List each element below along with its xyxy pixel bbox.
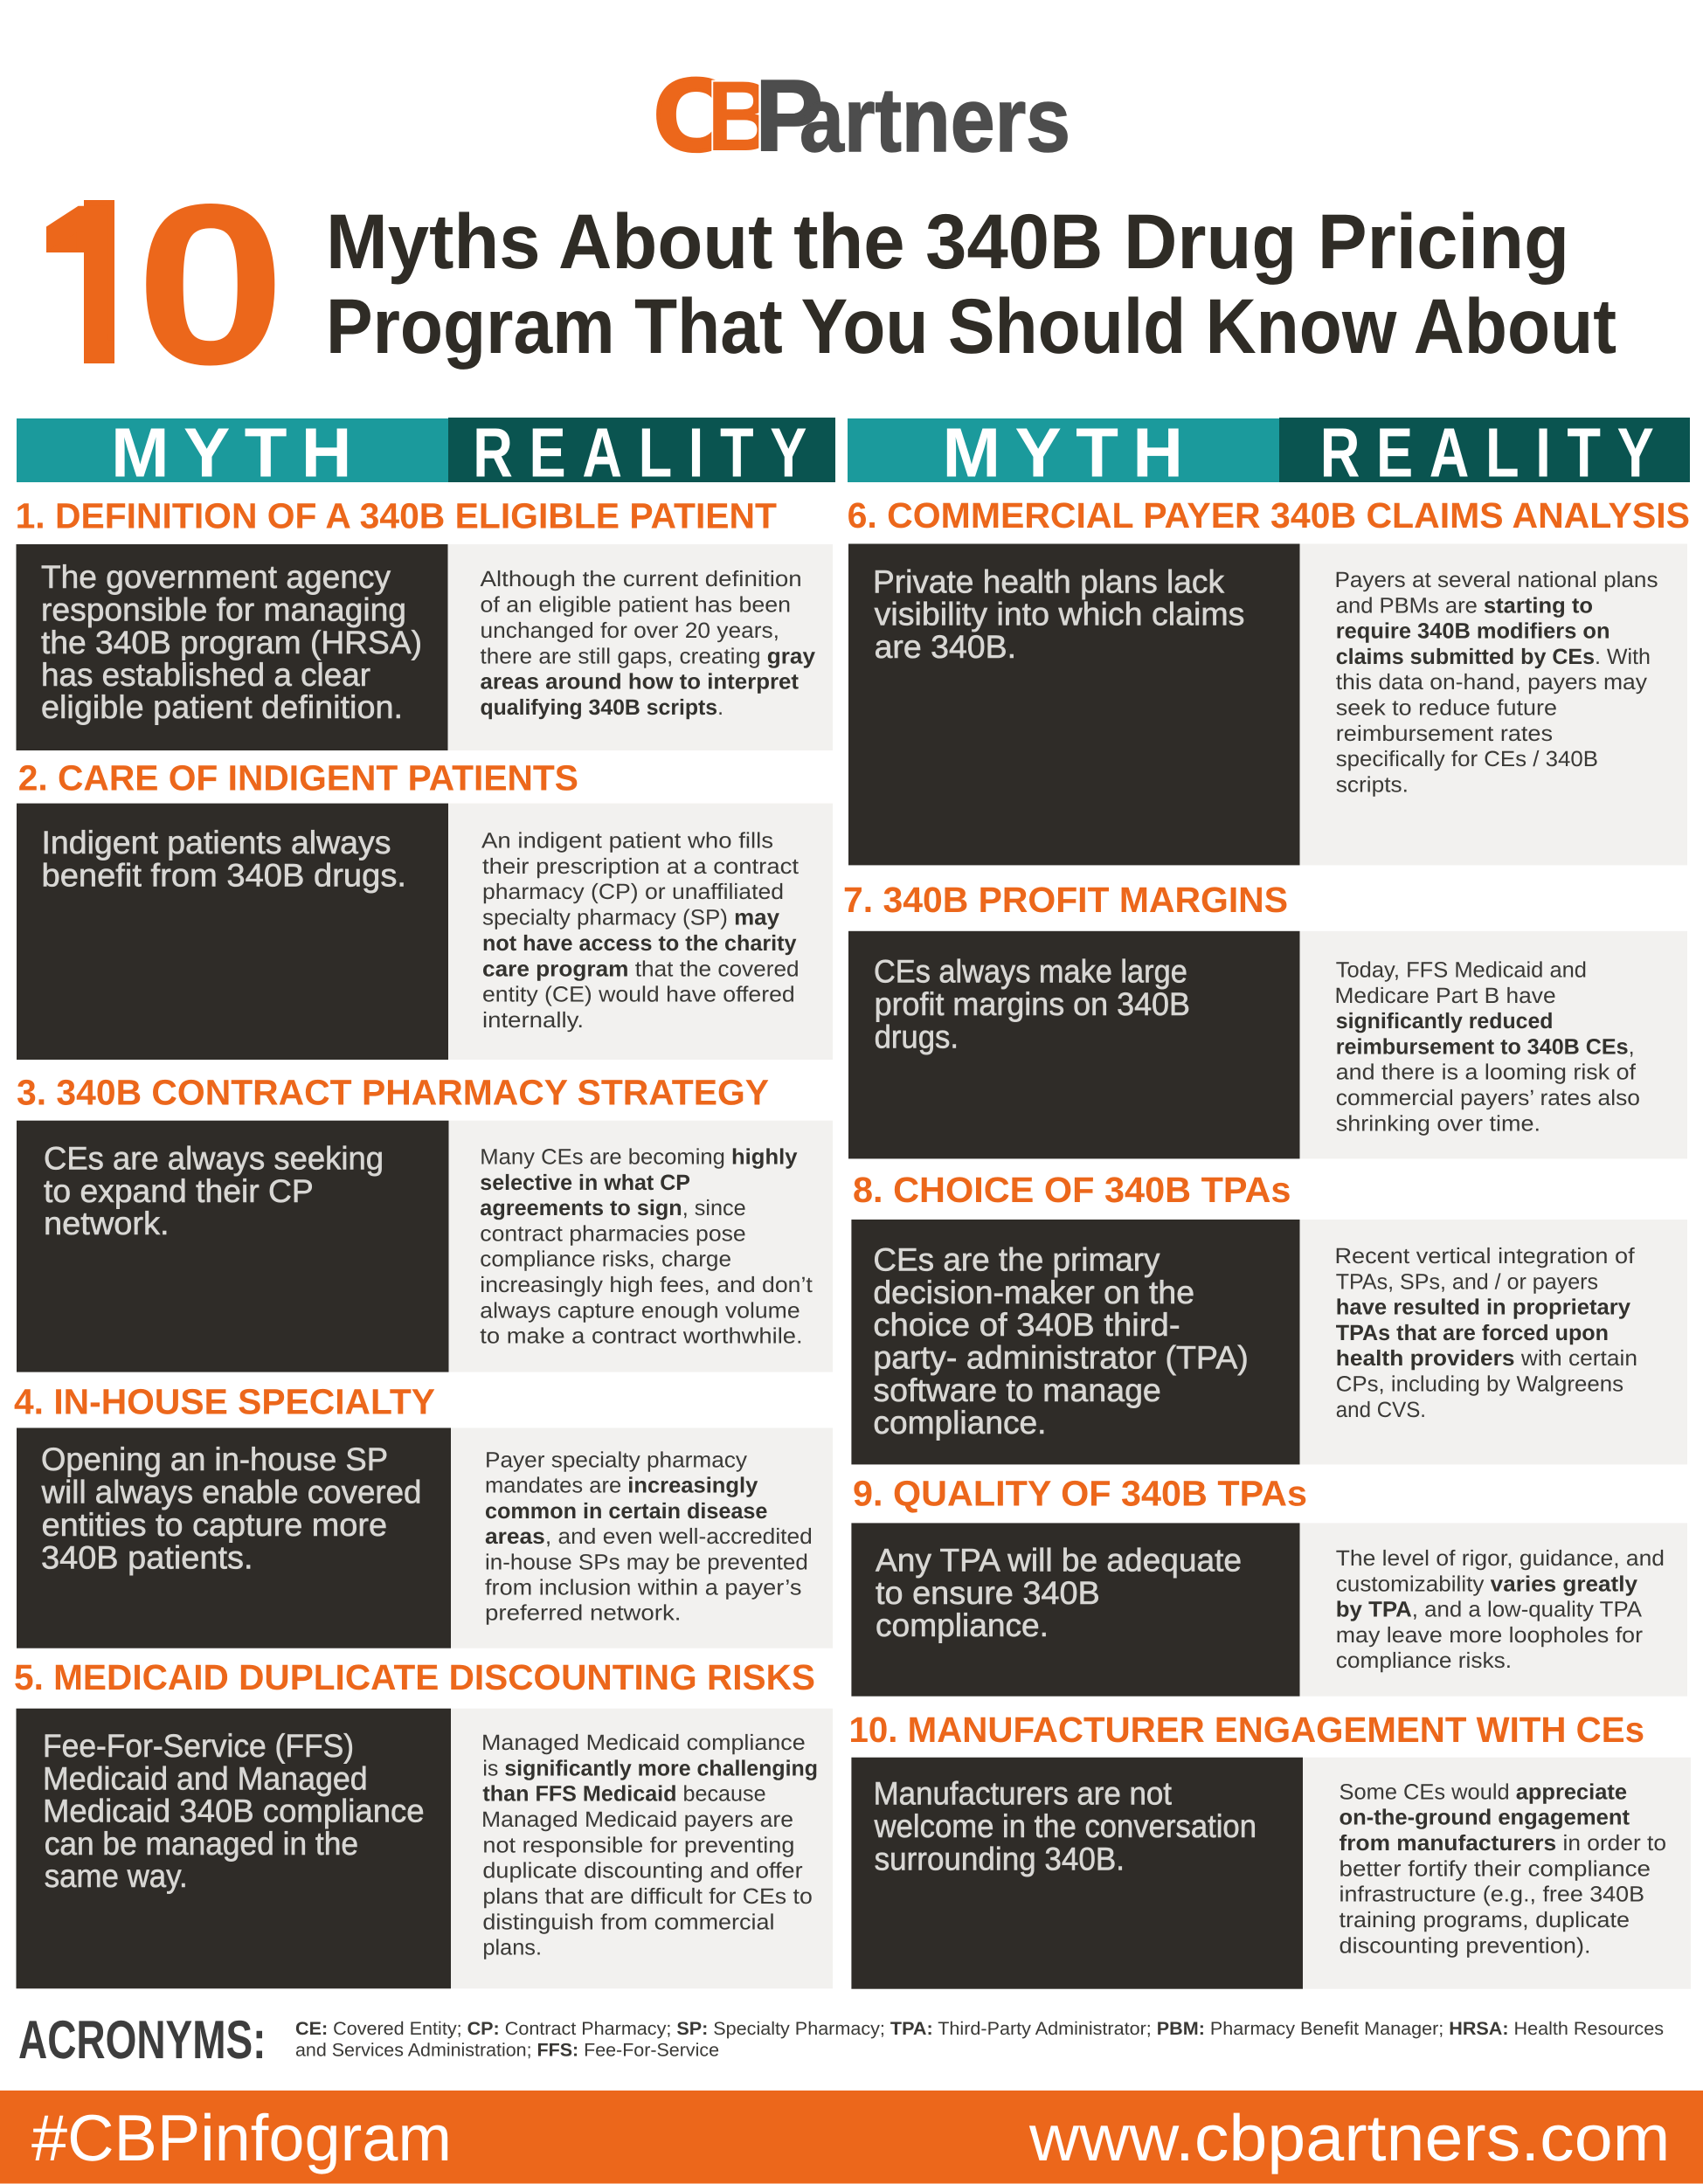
myth box 9: to ensure 340B [876, 1575, 1100, 1611]
reality box 3: Many CEs are becoming highly [480, 1144, 798, 1169]
reality box 1: qualifying 340B scripts. [481, 695, 723, 720]
myth box 6: visibility into which claims [875, 596, 1244, 632]
reality box 3: selective in what CP [480, 1171, 690, 1195]
reality box 4: mandates are increasingly [485, 1474, 758, 1498]
myth box 4: Opening an in-house SP [41, 1441, 388, 1477]
myth box 4: 340B patients. [41, 1540, 253, 1576]
reality box 4: from inclusion within a payer’s [485, 1576, 801, 1600]
myth box 10: surrounding 340B. [875, 1842, 1125, 1877]
header bar: right myth / reality: MYTH [942, 414, 1197, 492]
reality box 5: Managed Medicaid payers are [481, 1807, 793, 1832]
reality box 7: shrinking over time. [1336, 1111, 1540, 1136]
panel: myth 6 [848, 495, 1690, 865]
myth box 1: The government agency [41, 559, 391, 595]
logo: CBPartners: artners [800, 70, 1070, 171]
reality box 8: Recent vertical integration of [1335, 1244, 1635, 1268]
reality box 3: compliance risks, charge [480, 1248, 731, 1272]
reality box 1: Although the current definition [481, 567, 802, 591]
reality box 10: from manufacturers in order to [1339, 1831, 1666, 1856]
panel: myth 4 [14, 1382, 833, 1648]
heading 9: 9. QUALITY OF 340B TPAs [853, 1473, 1307, 1513]
reality box 5: plans that are difficult for CEs to [482, 1884, 813, 1909]
myth box 2 [17, 804, 448, 1060]
header bar: left myth / reality: REALITY [473, 414, 823, 492]
acronyms heading: ACRONYMS: [18, 2010, 266, 2070]
reality box 2: not have access to the charity [482, 931, 797, 956]
reality box 5: distinguish from commercial [482, 1910, 774, 1934]
reality box 6: specifically for CEs / 340B [1336, 747, 1598, 771]
heading 8: 8. CHOICE OF 340B TPAs [853, 1170, 1291, 1210]
myth box 7 [848, 931, 1300, 1158]
header bar: left myth / reality [17, 414, 835, 492]
reality box 8: have resulted in proprietary [1336, 1296, 1630, 1320]
reality box 2 [448, 804, 833, 1060]
panel: myth 2 [17, 758, 833, 1060]
myth box 8 [851, 1220, 1300, 1464]
heading 1: 1. DEFINITION OF A 340B ELIGIBLE PATIENT [16, 496, 777, 536]
big number 10: 0 [135, 156, 286, 412]
reality box 10: discounting prevention). [1339, 1933, 1591, 1958]
reality box 1: of an eligible patient has been [481, 592, 791, 617]
reality box 7: and there is a looming risk of [1336, 1061, 1636, 1085]
footer banner [0, 2091, 1703, 2184]
myth box 3: network. [44, 1206, 170, 1241]
logo: CBPartners: C [654, 58, 734, 173]
reality box 2: their prescription at a contract [482, 854, 799, 879]
reality box 6: reimbursement rates [1336, 722, 1553, 746]
reality box 8: health providers with certain [1336, 1346, 1637, 1371]
reality box 3: to make a contract worthwhile. [480, 1324, 803, 1349]
reality box 2: pharmacy (CP) or unaffiliated [482, 880, 784, 904]
reality box 3: increasingly high fees, and don’t [480, 1273, 813, 1297]
reality box 7: Today, FFS Medicaid and [1336, 957, 1587, 982]
reality box 10: Some CEs would appreciate [1339, 1780, 1627, 1804]
reality box 10: on-the-ground engagement [1339, 1806, 1630, 1830]
reality box 4: Payer specialty pharmacy [485, 1448, 748, 1473]
myth box 5: Fee-For-Service (FFS) [43, 1728, 354, 1764]
reality box 9 [1300, 1523, 1687, 1697]
reality box 2: care program that the covered [482, 957, 800, 981]
heading 7: 7. 340B PROFIT MARGINS [843, 880, 1288, 920]
myth box 2: benefit from 340B drugs. [42, 858, 406, 893]
myth box 1: responsible for managing [41, 591, 406, 627]
reality box 7 [1300, 931, 1687, 1158]
myth box 10: welcome in the conversation [874, 1808, 1256, 1844]
reality box 9: compliance risks. [1336, 1648, 1512, 1673]
header bar: right myth / reality [848, 414, 1690, 492]
myth box 8: party- administrator (TPA) [873, 1340, 1249, 1376]
myth box 7: profit margins on 340B [875, 986, 1190, 1022]
reality box 9: by TPA, and a low-quality TPA [1336, 1598, 1642, 1622]
acronyms text: CE: Covered Entity; CP: Contract Pharmacy; SP: Specialty Pharmacy; TPA: Third-Party Administrator; PBM: Pharmacy Benefit Manager; HRSA: Health Resources [295, 2019, 1664, 2039]
myth box 1: eligible patient definition. [41, 689, 403, 725]
reality box 9: The level of rigor, guidance, and [1336, 1546, 1665, 1571]
myth box 4: entities to capture more [42, 1507, 387, 1543]
myth box 1 [16, 544, 447, 750]
reality box 8 [1300, 1220, 1687, 1464]
reality box 6: this data on-hand, payers may [1336, 670, 1648, 695]
myth box 4 [17, 1427, 451, 1648]
myth box 1: the 340B program (HRSA) [41, 625, 422, 660]
reality box 1: unchanged for over 20 years, [481, 619, 779, 643]
reality box 8: and CVS. [1336, 1398, 1426, 1422]
myth box 3: CEs are always seeking [44, 1141, 384, 1176]
heading 6: 6. COMMERCIAL PAYER 340B CLAIMS ANALYSIS [848, 495, 1690, 536]
reality box 7: significantly reduced [1336, 1009, 1554, 1033]
panel: myth 8 [851, 1170, 1687, 1464]
myth box 8: software to manage [873, 1372, 1161, 1408]
myth box 8: choice of 340B third- [873, 1307, 1180, 1343]
myth box 5 [16, 1709, 451, 1988]
reality box 10: infrastructure (e.g., free 340B [1339, 1883, 1644, 1907]
myth box 5: same way. [45, 1858, 188, 1894]
reality box 7: reimbursement to 340B CEs, [1336, 1034, 1635, 1059]
myth box 9: Any TPA will be adequate [876, 1542, 1242, 1578]
title: Myths About the 340B Drug Pricing [326, 197, 1569, 285]
heading 2: 2. CARE OF INDIGENT PATIENTS [18, 758, 578, 798]
panel: myth 5 [14, 1657, 833, 1988]
reality box 8: TPAs that are forced upon [1336, 1321, 1609, 1345]
reality box 5: not responsible for preventing [482, 1833, 794, 1857]
myth box 7: CEs always make large [874, 954, 1187, 990]
myth box 1: has established a clear [41, 657, 370, 693]
reality box 8: TPAs, SPs, and / or payers [1336, 1269, 1598, 1294]
acronyms text [295, 2019, 1664, 2060]
myth box 7: drugs. [875, 1019, 959, 1054]
myth box 8: decision-maker on the [873, 1275, 1194, 1310]
myth box 8: compliance. [873, 1405, 1047, 1441]
myth box 6: are 340B. [875, 629, 1016, 665]
myth box 5: Medicaid 340B compliance [43, 1794, 425, 1829]
reality box 5: is significantly more challenging [482, 1756, 818, 1780]
reality box 7: commercial payers’ rates also [1336, 1086, 1640, 1110]
logo: CBPartners: B [707, 61, 775, 172]
reality box 6: require 340B modifiers on [1336, 619, 1610, 644]
myth box 9: compliance. [876, 1607, 1049, 1643]
reality box 4: common in certain disease [485, 1499, 767, 1524]
reality box 6: Payers at several national plans [1335, 568, 1658, 592]
reality box 5 [451, 1709, 833, 1988]
panel: myth 10 [849, 1710, 1691, 1989]
reality box 2: internally. [482, 1008, 584, 1033]
big number 10: 1 [23, 156, 150, 412]
heading 10: 10. MANUFACTURER ENGAGEMENT WITH CEs [849, 1710, 1644, 1750]
myth box 3: to expand their CP [44, 1173, 314, 1209]
big number 10 [46, 200, 274, 365]
myth box 8: CEs are the primary [873, 1242, 1160, 1277]
reality box 4: in-house SPs may be prevented [485, 1550, 808, 1574]
reality box 5: duplicate discounting and offer [482, 1859, 803, 1883]
reality box 2: An indigent patient who fills [481, 828, 773, 853]
reality box 1 [447, 544, 833, 750]
reality box 4: areas, and even well-accredited [485, 1524, 813, 1549]
reality box 4 [451, 1427, 833, 1648]
reality box 10: training programs, duplicate [1339, 1908, 1630, 1932]
reality box 6: scripts. [1336, 772, 1409, 797]
myth box 9 [851, 1523, 1300, 1697]
myth box 5: can be managed in the [45, 1826, 358, 1862]
hashtag: #CBPinfogram [31, 2101, 452, 2174]
website: www.cbpartners.com [1028, 2101, 1671, 2174]
heading 5: 5. MEDICAID DUPLICATE DISCOUNTING RISKS [14, 1657, 815, 1697]
reality box 2: specialty pharmacy (SP) may [482, 906, 779, 930]
title [326, 197, 1616, 370]
heading 3: 3. 340B CONTRACT PHARMACY STRATEGY [17, 1073, 769, 1113]
myth box 10: Manufacturers are not [874, 1776, 1173, 1812]
reality box 7: Medicare Part B have [1335, 984, 1556, 1008]
reality box 6: and PBMs are starting to [1336, 593, 1593, 618]
panel: myth 9 [851, 1473, 1687, 1697]
acronyms text: and Services Administration; FFS: Fee-For-Service [295, 2041, 719, 2060]
reality box 6: claims submitted by CEs. With [1336, 645, 1651, 669]
myth box 10 [851, 1758, 1303, 1989]
logo: CBPartners [654, 58, 1070, 173]
reality box 1: there are still gaps, creating gray [481, 644, 815, 668]
myth box 6: Private health plans lack [873, 563, 1224, 599]
reality box 2: entity (CE) would have offered [482, 983, 795, 1007]
reality box 10 [1303, 1758, 1691, 1989]
myth box 2: Indigent patients always [42, 825, 391, 860]
panel: myth 7 [843, 880, 1687, 1158]
reality box 6: seek to reduce future [1336, 695, 1557, 720]
reality box 9: customizability varies greatly [1336, 1572, 1637, 1596]
reality box 8: CPs, including by Walgreens [1336, 1372, 1623, 1396]
reality box 10: better fortify their compliance [1339, 1856, 1651, 1881]
reality box 5: than FFS Medicaid because [482, 1782, 766, 1807]
myth box 5: Medicaid and Managed [43, 1760, 368, 1796]
heading 4: 4. IN-HOUSE SPECIALTY [14, 1382, 435, 1422]
panel: myth 3 [17, 1073, 833, 1372]
reality box 5: Managed Medicaid compliance [481, 1731, 806, 1755]
panel: myth 1 [16, 496, 833, 750]
reality box 3: always capture enough volume [480, 1298, 800, 1323]
myth box 3 [17, 1121, 449, 1372]
myth box 4: will always enable covered [41, 1475, 422, 1510]
reality box 6 [1300, 543, 1687, 865]
reality box 3 [449, 1121, 833, 1372]
myth box 6 [848, 543, 1300, 865]
reality box 1: areas around how to interpret [481, 670, 800, 695]
reality box 9: may leave more loopholes for [1336, 1623, 1643, 1648]
header bar: left myth / reality: MYTH [111, 414, 366, 492]
reality box 4: preferred network. [485, 1601, 682, 1626]
reality box 3: agreements to sign, since [480, 1196, 746, 1220]
logo: CBPartners: P [755, 59, 823, 172]
reality box 3: contract pharmacies pose [480, 1221, 746, 1246]
reality box 5: plans. [482, 1936, 542, 1960]
